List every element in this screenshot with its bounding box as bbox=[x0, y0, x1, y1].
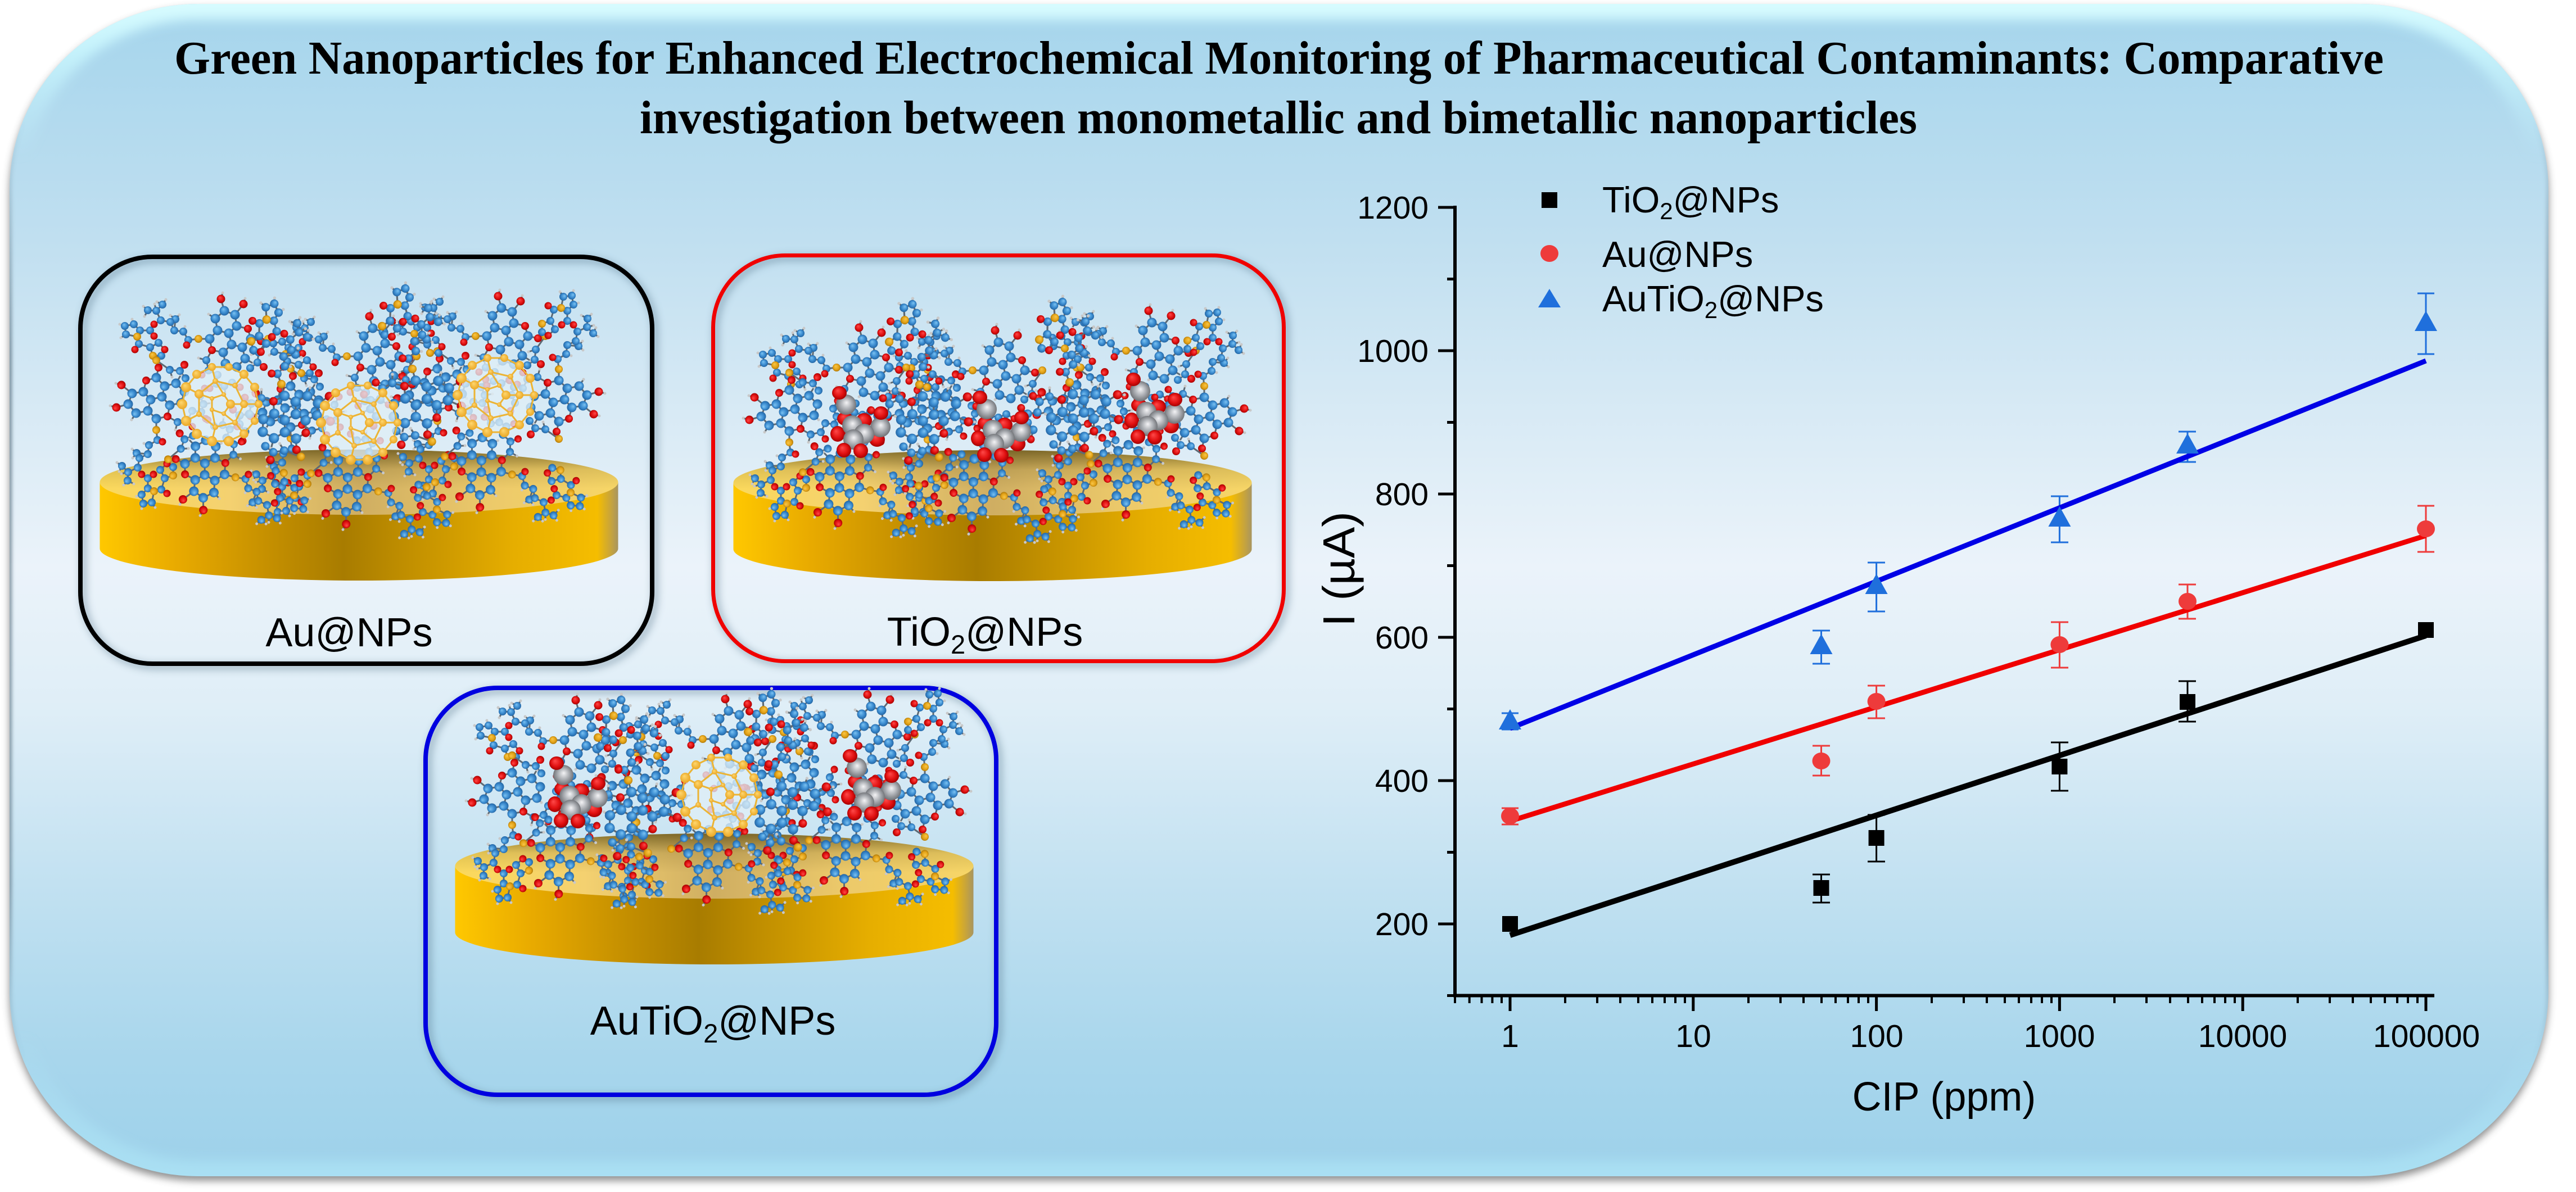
nanoparticles: TiO2 and gold bbox=[548, 749, 901, 837]
legend: @NPs bbox=[1673, 179, 1779, 220]
title: Green Nanoparticles for Enhanced Electrochemical Monitoring of Pharmaceutical Contaminants: Comparative bbox=[174, 32, 2384, 84]
y axis tick labels: 200 bbox=[1375, 907, 1429, 942]
series: Au@NPs bbox=[1501, 506, 2435, 824]
x axis title: CIP (ppm) bbox=[1852, 1075, 2036, 1120]
TiO2 clusters bbox=[830, 373, 1185, 463]
panel: AuTiO2@NPs bbox=[426, 678, 999, 1098]
y axis tick labels: 400 bbox=[1375, 763, 1429, 799]
x axis tick labels bbox=[1501, 1018, 2480, 1054]
x axis tick labels: 1000 bbox=[2024, 1018, 2095, 1054]
label: Au@NPs: Au@NPs bbox=[265, 610, 433, 655]
legend bbox=[1538, 179, 1824, 323]
label: AuTiO2@NPs: AuTiO bbox=[590, 999, 703, 1044]
legend: 2 bbox=[1705, 297, 1718, 323]
axes bbox=[1438, 206, 2434, 1011]
electrode disc bbox=[455, 833, 974, 964]
label: AuTiO2@NPs: @NPs bbox=[718, 999, 835, 1044]
title bbox=[174, 32, 2384, 144]
label: TiO2@NPs: @NPs bbox=[965, 610, 1083, 655]
label: AuTiO2@NPs: 2 bbox=[703, 1018, 718, 1048]
title: investigation between monometallic and bimetallic nanoparticles bbox=[640, 92, 1917, 144]
y axis tick labels: 800 bbox=[1375, 477, 1429, 513]
y axis tick labels: 600 bbox=[1375, 620, 1429, 656]
label: TiO2@NPs: 2 bbox=[951, 629, 965, 659]
legend: AuTiO bbox=[1602, 278, 1705, 319]
legend: @NPs bbox=[1718, 278, 1824, 319]
molecular layer bbox=[109, 272, 606, 558]
x axis tick labels: 100000 bbox=[2373, 1018, 2480, 1054]
molecular layer bbox=[464, 678, 973, 933]
legend: Au@NPs bbox=[1602, 234, 1753, 275]
series: AuTiO2@NPs bbox=[1499, 293, 2437, 729]
y axis tick labels: 1000 bbox=[1357, 333, 1429, 369]
panel: TiO2@NPs bbox=[713, 255, 1286, 664]
y axis tick labels bbox=[1357, 190, 1429, 942]
legend: 2 bbox=[1660, 198, 1673, 224]
y axis title: I (µA) bbox=[1314, 511, 1364, 627]
y axis tick labels: 1200 bbox=[1357, 190, 1429, 226]
label: TiO2@NPs: TiO bbox=[887, 610, 951, 655]
electrode disc bbox=[733, 450, 1251, 581]
electrode disc bbox=[100, 450, 618, 581]
x axis tick labels: 10000 bbox=[2198, 1018, 2287, 1054]
x axis tick labels: 1 bbox=[1501, 1018, 1519, 1054]
x axis tick labels: 10 bbox=[1675, 1018, 1711, 1054]
molecular layer bbox=[742, 285, 1251, 563]
panel: Au@NPs bbox=[80, 257, 655, 667]
legend: TiO bbox=[1602, 179, 1660, 220]
gold nanoparticle cages bbox=[177, 354, 538, 465]
series: TiO2@NPs bbox=[1502, 622, 2434, 935]
x axis tick labels: 100 bbox=[1850, 1018, 1904, 1054]
line chart: I vs CIP bbox=[1314, 179, 2480, 1120]
